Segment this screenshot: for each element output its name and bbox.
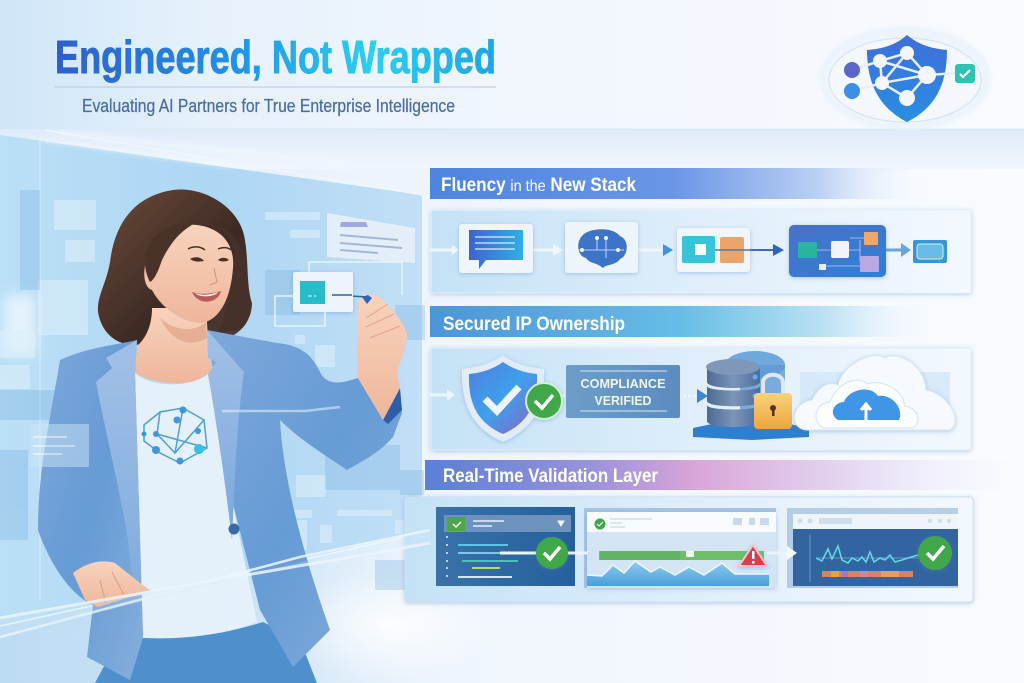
jacket right lapel [207,330,244,540]
connector arrows [500,546,797,560]
icon: module card [677,228,752,272]
jacket right and sleeve [207,330,402,667]
jacket left lapel [96,340,143,638]
connector arrows [430,243,911,257]
floating module card [293,272,353,312]
translucent overlay panels on presenter [30,407,340,467]
holographic glass screen behind presenter [0,130,500,683]
panel: Real-Time Validation Layer [405,460,1024,602]
heading text: Secured IP: Secured IP Ownership [443,314,625,335]
dashboard card: signal monitor [787,508,958,588]
title block [55,31,496,116]
icon: database with lock [693,351,809,440]
heading text: Real-Time: Real-Time Validation Layer [443,466,659,487]
pipeline panel [431,210,971,293]
navy sleeve lining [383,388,402,424]
icon: shield with check [462,355,562,442]
face features [188,247,231,302]
jacket button [228,524,240,534]
heading bar: Fluency [430,168,920,199]
icon: shield network emblem [821,28,989,128]
dashboard card: anomaly chart [584,508,776,588]
icon: chat card [459,224,533,273]
connector arrows [430,389,708,403]
compliance verified badge: COMPLIANCE [580,376,666,391]
heading text: Fluency: Fluency in the New Stack [441,175,636,196]
neck shadow [160,318,207,343]
icon: output chip [913,240,947,263]
subtitle: Evaluating AI Partners for True Enterprise Intelligence [82,96,455,116]
icon: upload cloud [795,356,955,430]
neck and chest [134,308,212,383]
icon: warning triangle [739,545,767,566]
compliance panel [431,348,971,450]
heading bar: Secured IP [430,306,930,337]
icon: AI brain card [565,222,638,273]
panel: Secured IP Ownership [430,306,971,450]
left overlay note [30,424,89,467]
right hand with stylus [333,293,407,420]
dashboard card: checklist [436,507,575,586]
hair fringe [145,222,197,282]
logo on shirt [142,406,207,464]
panel: Fluency in the New Stack [430,168,971,293]
icon: green check [918,536,952,570]
compliance verified badge: VERIFIED [594,393,652,408]
overlay streak [222,407,340,411]
glass tablet edge across presenter [0,530,430,637]
jeans [95,622,317,683]
presenter illustration [38,190,407,683]
title: Engineered, Not Wrapped [55,31,496,83]
hair back [98,190,252,345]
compliance verified badge [566,365,680,418]
heading bar: Real-Time [425,460,1024,490]
left hand [73,561,153,607]
icon: architecture diagram [789,225,886,277]
icon: green check [536,537,568,569]
floating UI cards near hand [275,213,415,326]
t-shirt [134,372,257,638]
dashboards panel [405,497,973,602]
floating text card [327,213,415,263]
jacket left [38,340,143,680]
hair right lock [205,222,250,332]
face [144,225,233,323]
